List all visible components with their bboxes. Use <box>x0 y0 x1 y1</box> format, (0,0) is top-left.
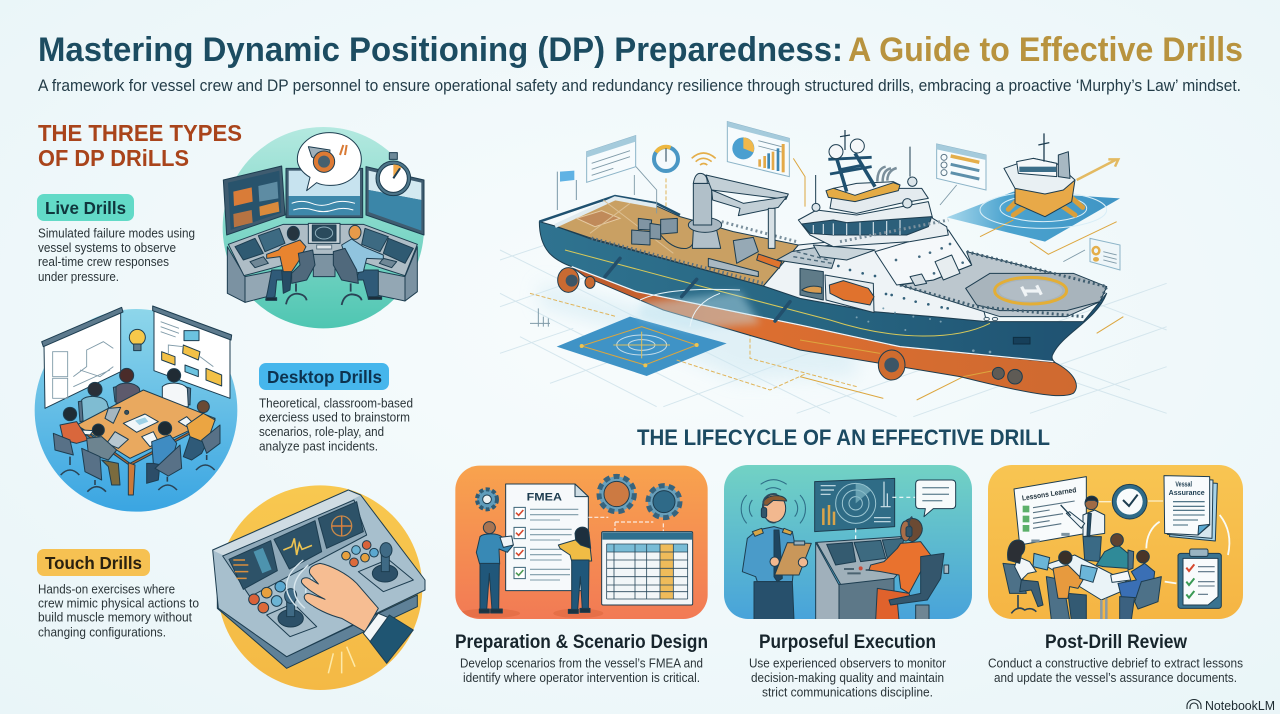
water panel with DP vessel <box>937 133 1120 270</box>
operator <box>869 517 931 620</box>
clipboard <box>1178 553 1221 608</box>
text: desktop drills description <box>259 396 413 454</box>
card description: strict communications discipline. <box>762 684 933 700</box>
text: live drills description: vessel systems to observe <box>38 240 176 255</box>
hull windows <box>837 265 949 310</box>
translucent water overlay <box>640 292 760 330</box>
card illustration: FMEA: FMEA <box>527 491 562 503</box>
card description: Conduct a constructive debrief to extract lessons <box>988 656 1243 670</box>
accommodation block <box>875 230 972 285</box>
data panel left <box>587 136 657 213</box>
person: yellow shirt <box>187 413 215 443</box>
text: desktop drills description: scenarios, role-play, and <box>259 424 384 439</box>
small panel right <box>1063 238 1120 270</box>
heading: the three types of DP drills <box>38 120 242 171</box>
panel: review <box>988 465 1243 685</box>
ripple arcs <box>286 560 317 608</box>
consoles and operators <box>227 223 417 305</box>
joystick left <box>267 603 317 637</box>
small antenna <box>530 308 550 327</box>
text: touch drills description <box>38 582 199 640</box>
clock <box>1112 484 1147 519</box>
teal man <box>1096 534 1134 570</box>
card illustration: debrief: Vessal <box>1175 481 1192 488</box>
document <box>506 484 588 591</box>
joystick right <box>358 559 413 592</box>
console <box>816 542 839 620</box>
fins <box>605 258 790 321</box>
text: touch drills description: crew mimic physical actions to <box>38 596 199 610</box>
card description: Use experienced observers to monitor <box>749 656 947 670</box>
card description: and update the vessel’s assurance documents. <box>994 670 1237 685</box>
superstructure <box>777 130 1107 353</box>
bridge <box>798 202 948 247</box>
gold arrow <box>1077 159 1118 180</box>
title: A Guide to Effective Drills <box>848 31 1243 69</box>
text: touch drills description: changing configurations. <box>38 624 166 640</box>
card illustration: debrief: Assurance <box>1169 490 1205 497</box>
thruster stern <box>558 268 595 292</box>
chart panel <box>727 122 805 207</box>
crane <box>688 173 788 248</box>
white superstructure side <box>763 230 987 322</box>
waterline stripes <box>565 250 990 336</box>
label: touch drills <box>37 549 150 576</box>
hand <box>301 563 378 632</box>
rails and walls <box>777 243 840 268</box>
hull blue <box>539 222 1107 362</box>
chairs <box>53 425 220 480</box>
title: Mastering Dynamic Positioning (DP) Preparedness: <box>38 31 843 69</box>
blueprint panel <box>557 317 727 376</box>
panel: touch drills <box>37 485 425 690</box>
card title: Post-Drill Review <box>1045 631 1188 653</box>
card illustration: bridge operators <box>724 465 972 620</box>
card description <box>460 656 703 685</box>
heading: the three types of DP drills: THE THREE TYPES <box>38 120 242 146</box>
deck machinery <box>733 237 758 263</box>
watermark: NotebookLM: NotebookLM <box>1205 698 1275 713</box>
mast <box>837 153 875 192</box>
stopwatch <box>389 153 397 159</box>
card description <box>988 656 1243 685</box>
label: touch drills: Touch Drills <box>45 553 142 573</box>
illustration: console and hand <box>213 485 425 690</box>
card description <box>749 656 947 700</box>
card description: decision-making quality and maintain <box>751 670 944 685</box>
operator blue <box>355 270 378 298</box>
text: live drills description <box>38 226 195 284</box>
table <box>602 532 693 605</box>
doc stack <box>1170 480 1217 541</box>
card title: Preparation & Scenario Design <box>455 631 708 653</box>
glow under hull <box>540 283 857 380</box>
card illustration: FMEA <box>455 466 708 619</box>
grid floor <box>500 217 1167 417</box>
table <box>77 418 215 466</box>
label: live drills <box>37 194 134 221</box>
console screens <box>235 238 263 260</box>
lifeboat on deck <box>757 254 782 268</box>
panel: execution <box>724 465 972 700</box>
text: live drills description: Simulated failure modes using <box>38 226 195 240</box>
person right <box>558 540 592 561</box>
checklist panel <box>937 144 986 205</box>
person: blue shirt <box>147 463 160 483</box>
card title: Purposeful Execution <box>759 631 936 653</box>
meeting table <box>1048 554 1128 600</box>
text: touch drills description: build muscle memory without <box>38 610 192 624</box>
card illustration: debrief: Lessons Learned <box>1021 485 1077 503</box>
illustration: classroom meeting <box>35 306 237 512</box>
speech bubble <box>916 480 956 517</box>
panel: preparation <box>455 466 708 685</box>
card description: identify where operator intervention is critical. <box>463 670 700 685</box>
text: desktop drills description: exerciess used to brainstorm <box>259 410 410 424</box>
whiteboards <box>44 310 121 408</box>
lifeboat bays <box>800 268 823 300</box>
light bulb <box>129 329 145 345</box>
radar screen <box>815 478 895 532</box>
orange man <box>1046 551 1086 620</box>
hull lower <box>572 267 1076 396</box>
heading: lifecycle: THE LIFECYCLE OF AN EFFECTIVE DRILL <box>637 425 1050 450</box>
helideck <box>900 252 1107 317</box>
heading: the three types of DP drills: OF DP DRiLLS <box>38 145 189 171</box>
person: grey shirt <box>102 460 120 485</box>
chair <box>889 553 944 605</box>
cycle arrows <box>1146 515 1229 583</box>
ship illustration <box>500 122 1167 417</box>
buttons left <box>249 581 286 613</box>
console desks <box>227 247 245 302</box>
gauge <box>654 147 678 171</box>
presenter <box>1061 496 1105 562</box>
panel: live drills <box>37 127 424 328</box>
whiteboard <box>1014 477 1086 545</box>
wooden deck <box>555 198 798 286</box>
rear people <box>78 400 88 422</box>
upper deck <box>830 188 928 213</box>
title <box>38 31 1243 69</box>
speech bubble with thruster <box>297 133 361 191</box>
woman <box>1003 540 1043 613</box>
buttons right <box>342 541 378 567</box>
radomes <box>829 145 843 159</box>
flag <box>557 171 576 210</box>
gears <box>477 489 497 509</box>
azimuth thruster <box>878 350 905 380</box>
cuff and sleeve <box>363 613 390 643</box>
label: live drills: Live Drills <box>45 198 126 218</box>
blue man <box>1118 550 1161 620</box>
DP vessel thrusters <box>1008 195 1083 215</box>
text: live drills description: under pressure. <box>38 269 119 284</box>
monitors <box>223 166 285 235</box>
label: desktop drills <box>259 363 389 390</box>
label: desktop drills: Desktop Drills <box>267 367 382 387</box>
person left <box>476 534 513 564</box>
laptop 1 <box>1033 553 1050 570</box>
bow thrusters <box>963 370 997 377</box>
text: live drills description: real-time crew responses <box>38 254 169 269</box>
person: red shirt <box>60 422 88 443</box>
cargo <box>632 218 677 245</box>
table items <box>53 401 220 492</box>
circuit lines <box>530 178 857 390</box>
operator orange <box>266 270 292 300</box>
text: desktop drills description: Theoretical, classroom-based <box>259 396 413 410</box>
illustration: DP control room <box>223 127 424 328</box>
text: touch drills description: Hands-on exercises where <box>38 582 175 596</box>
wifi icon <box>692 153 716 165</box>
laptop 2 <box>1080 565 1097 582</box>
card description: Develop scenarios from the vessel’s FMEA and <box>460 656 703 670</box>
panel: desktop drills <box>35 306 413 512</box>
text: desktop drills description: analyze past incidents. <box>259 438 378 454</box>
officer <box>741 480 811 620</box>
card illustration: debrief <box>988 465 1243 620</box>
